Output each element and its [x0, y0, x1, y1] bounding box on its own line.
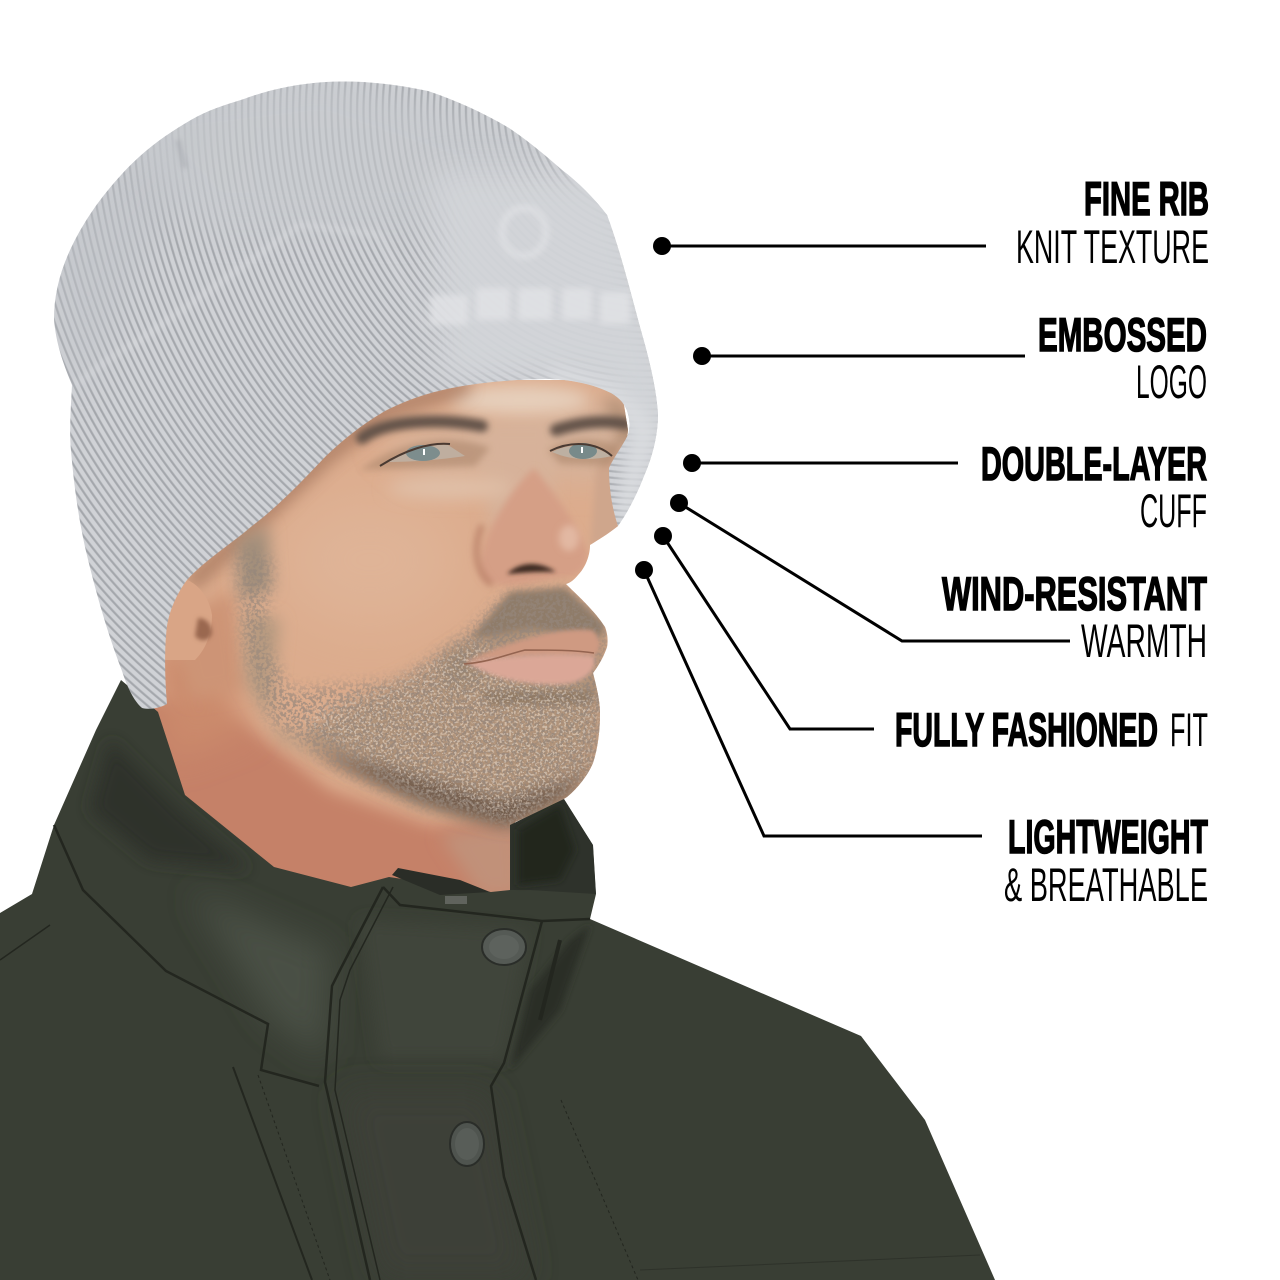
label: fine rib knit texture	[1016, 172, 1209, 273]
cheek light	[318, 524, 422, 596]
tonal shading	[55, 158, 172, 366]
fold line	[75, 225, 425, 385]
photo: man wearing beanie and jacket	[0, 70, 995, 1280]
label: fine rib knit texture: FINE RIB	[1084, 172, 1209, 225]
forehead and eye area	[418, 409, 614, 476]
cuff edge light	[550, 376, 645, 520]
callout: double-layer leader	[683, 454, 958, 472]
labels	[895, 172, 1209, 911]
embossed logo	[430, 208, 630, 325]
left eye	[380, 444, 465, 466]
jacket seams	[0, 825, 980, 1280]
zipper	[392, 868, 490, 895]
label: lightweight and breathable	[1004, 810, 1208, 911]
shadow under beanie	[190, 385, 469, 585]
callout lines	[635, 237, 1070, 836]
side of face near ear	[192, 592, 240, 688]
far cheek	[591, 444, 622, 544]
crown seam	[178, 140, 185, 168]
label: fully fashioned fit: FIT	[1170, 703, 1208, 756]
callout: lightweight leader	[635, 561, 982, 836]
jacket	[0, 680, 995, 1280]
callout: fully fashioned leader	[654, 527, 874, 729]
eye shadows	[360, 440, 490, 470]
callout: fine rib leader	[653, 237, 986, 255]
beard base	[300, 590, 607, 825]
neck	[154, 702, 510, 892]
callout: embossed leader	[693, 347, 1025, 365]
label: double-layer cuff: CUFF	[1140, 484, 1207, 537]
snap button: lower	[450, 1122, 484, 1166]
head: skin	[154, 380, 628, 892]
lips	[464, 630, 600, 684]
beanie	[40, 70, 680, 720]
eyebrows	[362, 422, 626, 438]
right eye	[550, 443, 612, 459]
logo band lightening	[421, 158, 658, 493]
label: embossed logo	[1038, 308, 1207, 408]
callout: wind-resistant leader	[670, 494, 1070, 641]
nose	[477, 468, 587, 585]
ear	[165, 575, 212, 660]
label: embossed logo: LOGO	[1136, 355, 1207, 408]
snap button: upper	[482, 929, 526, 965]
label: wind-resistant warmth	[942, 567, 1207, 667]
stubble texture	[238, 550, 607, 825]
label: double-layer cuff	[981, 437, 1207, 537]
